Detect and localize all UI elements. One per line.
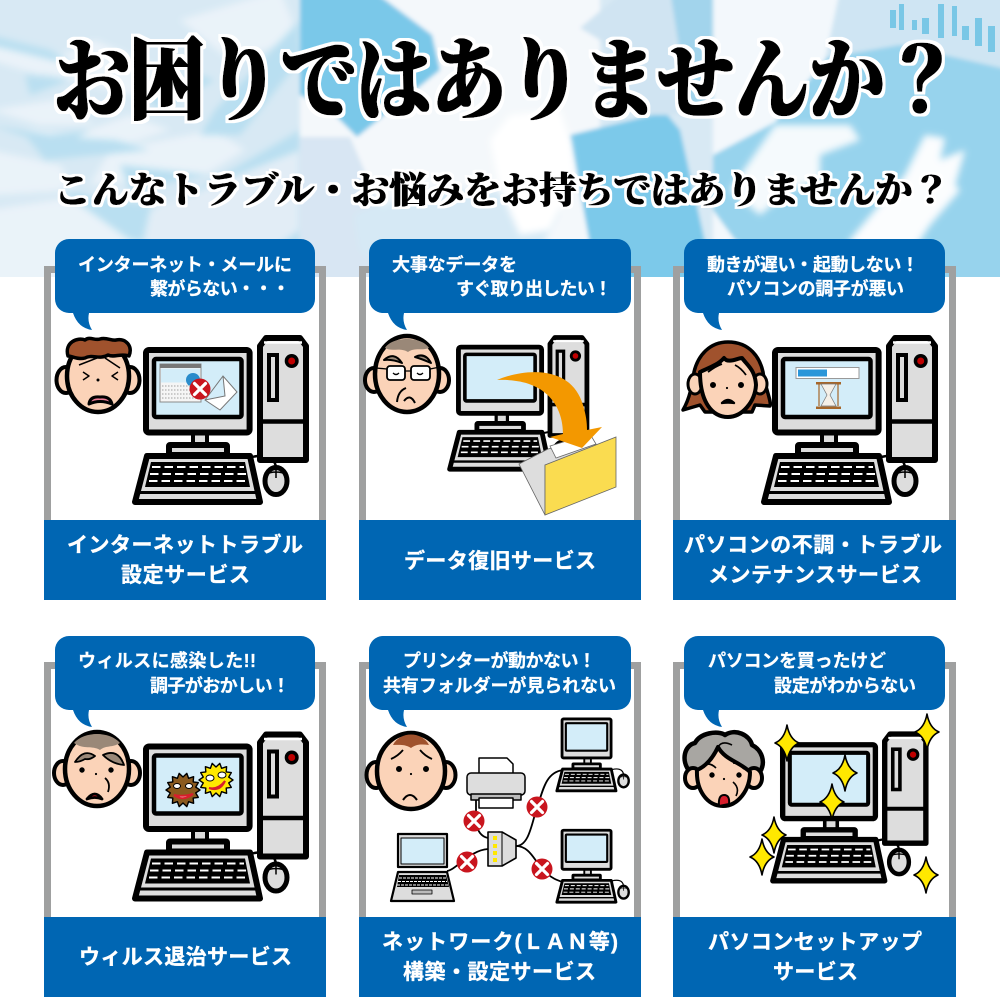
panel frame: [44, 266, 326, 600]
speech bubble: ウィルスに感染した!!: [78, 650, 256, 671]
speech bubble: [55, 239, 315, 330]
banner: network setup: [359, 917, 641, 997]
screen: virus germs: [166, 763, 233, 807]
panel frame: [44, 662, 326, 997]
banner: internet trouble setup: 設定サービス: [121, 564, 250, 587]
speech bubble: [684, 636, 945, 727]
speech bubble: パソコンを買ったけど: [708, 651, 886, 671]
speech bubble: 調子がおかしい！: [150, 675, 290, 696]
speech bubble: 動きが遅い・起動しない！: [707, 254, 919, 275]
subtitle: こんなトラブル・お悩みをお持ちではありませんか？: [54, 170, 950, 212]
speech bubble: 設定がわからない: [774, 675, 916, 696]
banner: pc trouble maintenance: メンテナンスサービス: [708, 564, 922, 587]
banner: data recovery: [359, 520, 641, 600]
speech bubble: パソコンの調子が悪い: [727, 278, 904, 299]
speech bubble: プリンターが動かない！: [403, 650, 596, 671]
speech bubble: [369, 636, 631, 727]
face: older man with glasses: [365, 336, 449, 412]
banner: data recovery: データ復旧サービス: [404, 549, 596, 573]
banner: pc setup: [673, 917, 956, 997]
banner: internet trouble setup: [44, 520, 326, 600]
face: worried woman: [683, 342, 770, 417]
icon: folder: [519, 434, 616, 515]
panel: data recovery service: [359, 239, 641, 600]
face: older man sad: [54, 732, 140, 806]
icon: desktop computer: [135, 734, 306, 898]
icon: failure marks: [456, 796, 552, 880]
speech bubble: [369, 239, 631, 330]
panel frame: [673, 266, 956, 600]
screen: progress bar and hourglass: [796, 368, 859, 409]
panel: pc setup service: [673, 636, 956, 997]
speech bubble: [684, 239, 945, 330]
panel: internet trouble service: [44, 239, 326, 600]
banner: pc setup: サービス: [773, 961, 858, 984]
network cables: [447, 770, 563, 882]
face: older woman: [685, 732, 763, 806]
face: worried young man: [366, 733, 456, 809]
face: worried man with closed eyes: [56, 338, 140, 412]
banner: virus removal: ウィルス退治サービス: [79, 946, 292, 969]
banner: pc setup: パソコンセットアップ: [708, 931, 922, 954]
panel frame: [673, 662, 956, 997]
panel frame: [359, 662, 641, 997]
icon: desktop computer: [450, 338, 587, 469]
icon: desktop pc top: [557, 719, 629, 791]
speech bubble: [55, 636, 315, 727]
icon: desktop computer: [764, 338, 935, 502]
background photo collage: [0, 0, 1000, 300]
banner: pc trouble maintenance: パソコンの不調・トラブル: [684, 533, 942, 557]
banner: network setup: ネットワーク(ＬＡＮ等): [382, 931, 618, 954]
icon: desktop computer: [135, 338, 306, 502]
icon: desktop pc bottom: [557, 830, 629, 902]
icon: sparkles: [750, 714, 939, 893]
speech bubble: インターネット・メールに: [78, 255, 292, 275]
banner: network setup: 構築・設定サービス: [403, 961, 596, 984]
screen: browser and mail failure: [160, 364, 237, 410]
icon: notebook computer: [391, 834, 454, 901]
speech bubble: すぐ取り出したい！: [456, 279, 612, 299]
speech bubble: 共有フォルダーが見られない: [383, 675, 616, 696]
panel: virus removal service: [44, 636, 326, 997]
banner: virus removal: [44, 917, 326, 997]
icon: printer: [467, 758, 525, 808]
panel: maintenance service: [673, 239, 956, 600]
panel: network service: [359, 636, 641, 997]
banner: internet trouble setup: インターネットトラブル: [67, 533, 303, 557]
icon: desktop computer: [773, 734, 926, 881]
banner: pc trouble maintenance: [673, 520, 956, 600]
arrow: data to folder: [497, 372, 602, 448]
icon: network hub: [488, 832, 516, 866]
panel frame: [359, 266, 641, 600]
speech bubble: 繋がらない・・・: [150, 278, 290, 299]
speech bubble: 大事なデータを: [392, 254, 517, 275]
